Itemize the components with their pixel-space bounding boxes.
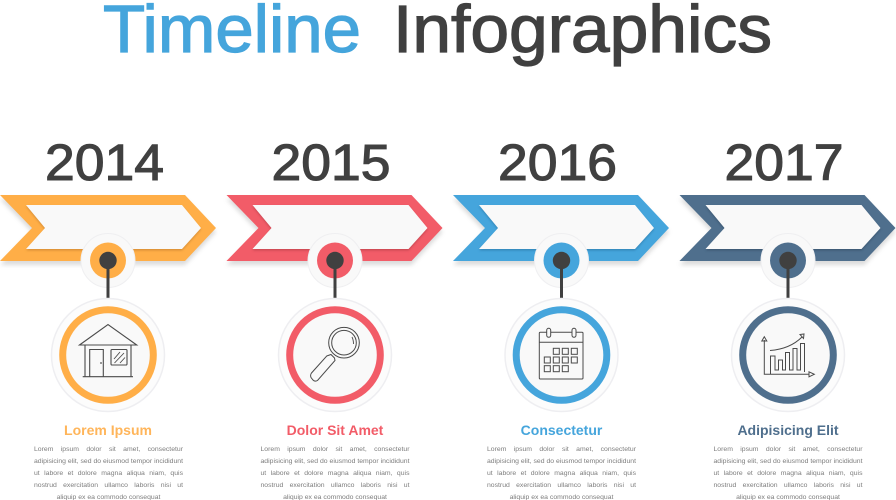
arrow: 2016 [453, 195, 669, 265]
text block: 2015: Lorem ipsum dolor sit amet, consectetur [260, 446, 410, 453]
icon: calendar [539, 328, 583, 379]
text block: 2016: Lorem ipsum dolor sit amet, consectetur [487, 446, 636, 453]
icon circle: magnifier [278, 298, 392, 412]
marker: 2017 [761, 234, 815, 298]
heading: Dolor Sit Amet: Dolor Sit Amet [287, 422, 383, 438]
heading: Consectetur: Consectetur [521, 422, 602, 438]
text block: 2015: ut labore et dolore magna aliqua niam, quis [260, 470, 410, 477]
arrow: 2015 [226, 195, 442, 265]
text block: 2014: Lorem ipsum dolor sit amet, consectetur [34, 446, 183, 453]
text block: 2016 [487, 446, 636, 500]
icon: magnifier [311, 327, 359, 381]
icon: chart [762, 334, 814, 377]
text block: 2014: ut labore et dolore magna aliqua niam, quis [34, 470, 183, 477]
text block: 2016: nostrud exercitation ullamco laboris nisi ut [487, 482, 636, 489]
text block: 2017: Lorem ipsum dolor sit amet, consectetur [714, 446, 862, 453]
marker: 2015 [308, 234, 362, 298]
text block: 2016: adipisicing elit, sed do eiusmod tempor incididunt [487, 458, 636, 465]
icon circle: calendar [505, 298, 618, 412]
year: 2014: 2014 [45, 134, 164, 191]
text block: 2014: adipisicing elit, sed do eiusmod tempor incididunt [34, 458, 183, 465]
text block: 2015 [260, 446, 410, 500]
text block: 2017: nostrud exercitation ullamco laboris nisi ut [714, 482, 862, 489]
arrow: 2017 [680, 195, 896, 265]
year: 2016: 2016 [498, 134, 617, 191]
heading: Adipisicing Elit: Adipisicing Elit [737, 422, 839, 438]
text block: 2017: adipisicing elit, sed do eiusmod tempor incididunt [714, 458, 862, 465]
text block: 2017 [714, 446, 862, 500]
heading: Lorem Ipsum: Lorem Ipsum [64, 422, 152, 438]
icon: house [80, 324, 137, 377]
text block: 2015: adipisicing elit, sed do eiusmod tempor incididunt [260, 458, 410, 465]
title [103, 0, 772, 67]
text block: 2017: ut labore et dolore magna aliqua niam, quis [714, 470, 862, 477]
year: 2015: 2015 [272, 134, 390, 191]
text block: 2014: nostrud exercitation ullamco laboris nisi ut [34, 482, 183, 489]
text block: 2016: ut labore et dolore magna aliqua niam, quis [487, 470, 636, 477]
text block: 2014 [34, 446, 183, 500]
marker: 2014 [81, 234, 135, 298]
marker: 2016 [534, 234, 588, 298]
arrow: 2014 [0, 195, 216, 265]
text block: 2015: nostrud exercitation ullamco laboris nisi ut [260, 482, 410, 489]
icon circle: house [52, 298, 164, 412]
icon circle: chart [732, 298, 844, 412]
year: 2017: 2017 [724, 134, 844, 191]
